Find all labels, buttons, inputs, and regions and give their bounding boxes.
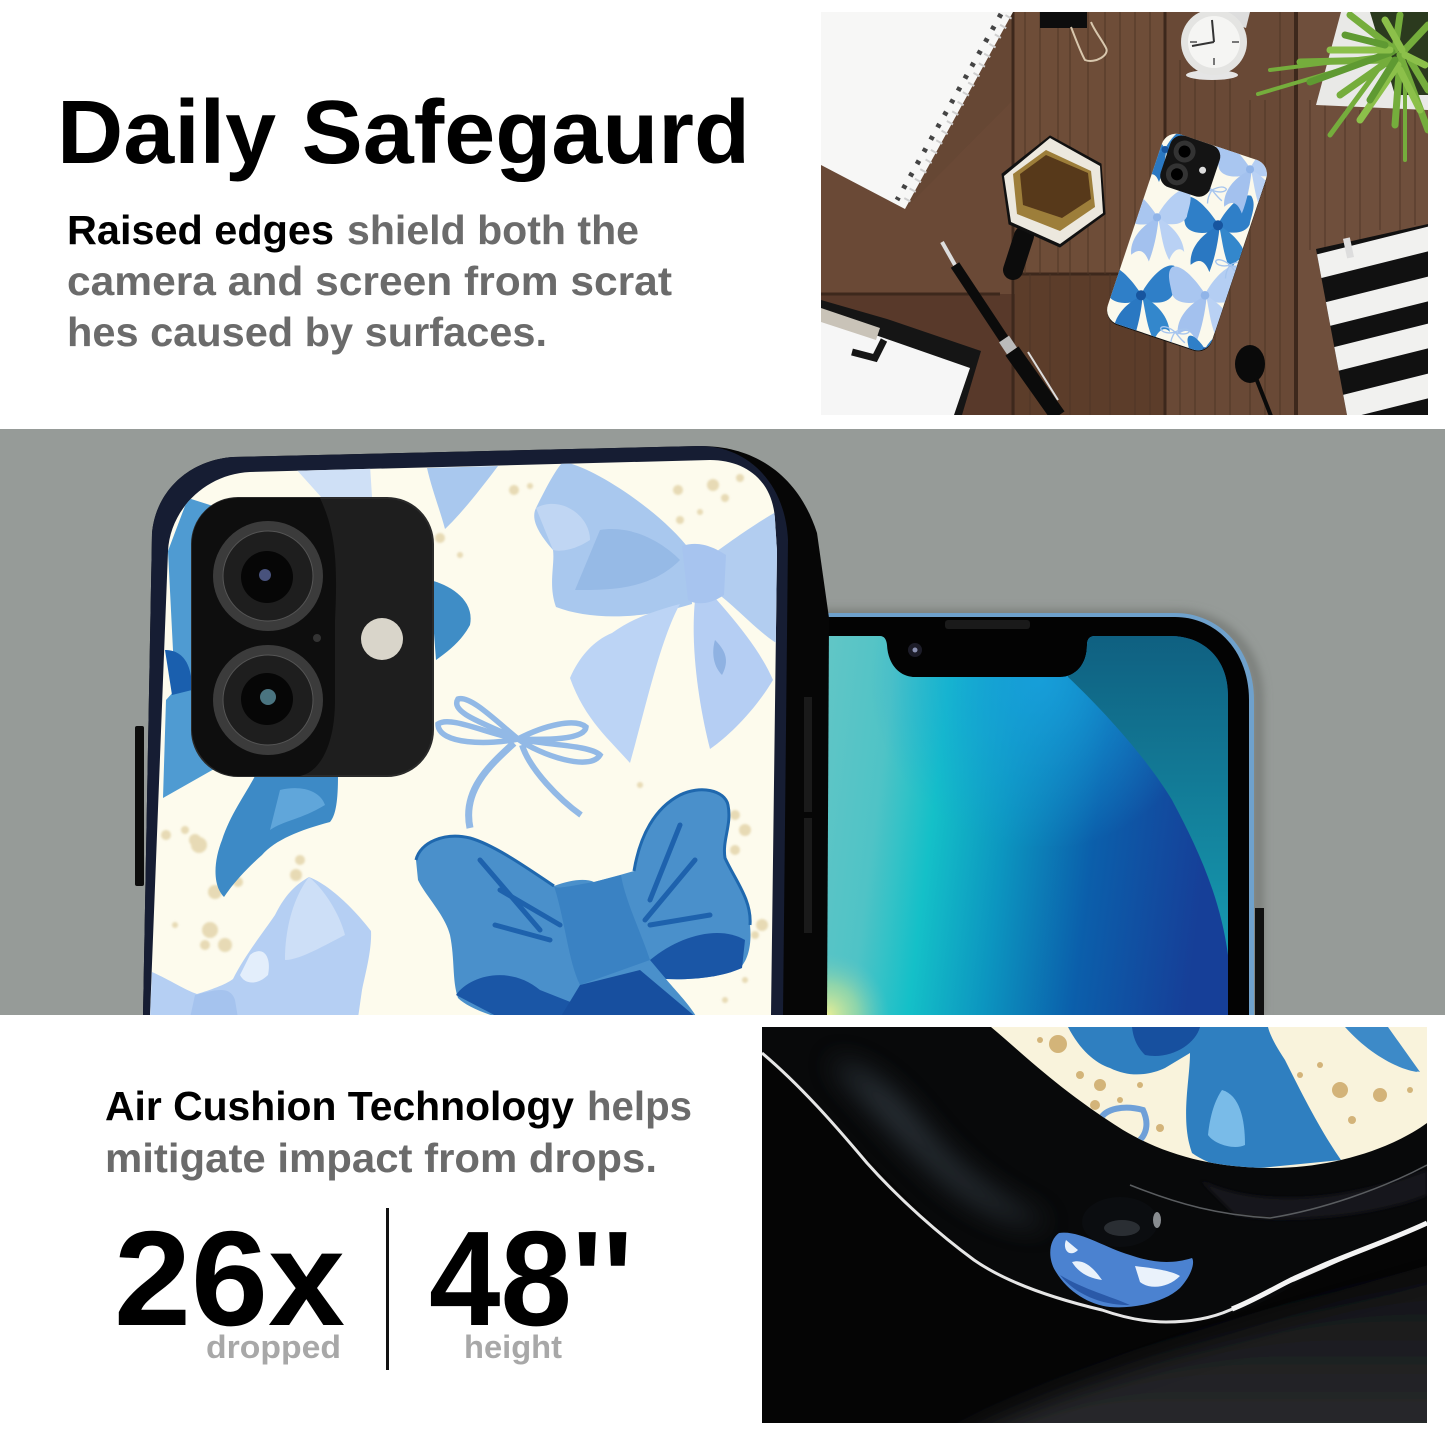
case bumper — [824, 1048, 1427, 1240]
mini phone case with bows — [1107, 134, 1267, 352]
clipboard — [821, 300, 981, 415]
text block: raised edges description: shield both the — [347, 207, 639, 253]
text block: air cushion description: helps — [587, 1083, 692, 1129]
light bow fragments — [298, 468, 372, 497]
camera module — [192, 498, 433, 776]
text block: raised edges description: Raised edges — [67, 207, 334, 253]
panel: air cushion close-up photo — [762, 1027, 1445, 1445]
text block: raised edges description: hes caused by surfaces. — [67, 309, 547, 355]
alarm clock — [1181, 9, 1250, 80]
small ribbon — [438, 699, 600, 828]
lens: lower — [213, 645, 323, 755]
water drop on case — [1050, 1212, 1194, 1308]
panel: grey band with phones — [0, 429, 1445, 1018]
plant — [1258, 12, 1428, 160]
wood desk — [821, 12, 1428, 415]
text block: air cushion description: Air Cushion Technology — [105, 1083, 574, 1129]
text block: raised edges description — [67, 207, 672, 355]
notebook — [821, 12, 1013, 209]
large light bow — [534, 462, 780, 763]
table surface — [974, 1282, 1427, 1423]
lens: upper — [213, 521, 323, 631]
spoon — [1235, 345, 1271, 416]
flash — [361, 618, 403, 660]
stat: 48 inch height: height — [464, 1329, 562, 1365]
microphone — [313, 634, 321, 642]
light bow bottom-left — [150, 877, 371, 1018]
text block: air cushion description — [105, 1083, 692, 1181]
stat: 26x dropped: dropped — [206, 1329, 341, 1365]
binder clip — [1040, 10, 1107, 61]
front phone with screen — [815, 613, 1264, 1015]
striped notebook — [1316, 224, 1428, 415]
printed back panel — [150, 460, 777, 1015]
blue bow left of camera — [163, 498, 471, 897]
stat: 26x dropped: 26x — [114, 1203, 345, 1354]
title: Daily Safegaurd — [57, 83, 750, 183]
pen — [942, 242, 1058, 416]
coffee cup — [1002, 136, 1105, 270]
side button — [1255, 908, 1264, 1015]
dark blue bow — [416, 790, 751, 1018]
text block: air cushion description: mitigate impact from drops. — [105, 1135, 657, 1181]
printed back with bow — [991, 1027, 1427, 1170]
text block: raised edges description: camera and screen from scrat — [67, 258, 672, 304]
panel: desk lifestyle photo — [821, 9, 1440, 418]
side buttons — [135, 726, 144, 886]
back phone case — [135, 446, 829, 1018]
shadow — [815, 615, 1258, 1015]
gold speckles — [161, 474, 768, 1003]
glossy edge highlight — [762, 1053, 1427, 1322]
stat: 48 inch height: 48'' — [429, 1203, 633, 1354]
